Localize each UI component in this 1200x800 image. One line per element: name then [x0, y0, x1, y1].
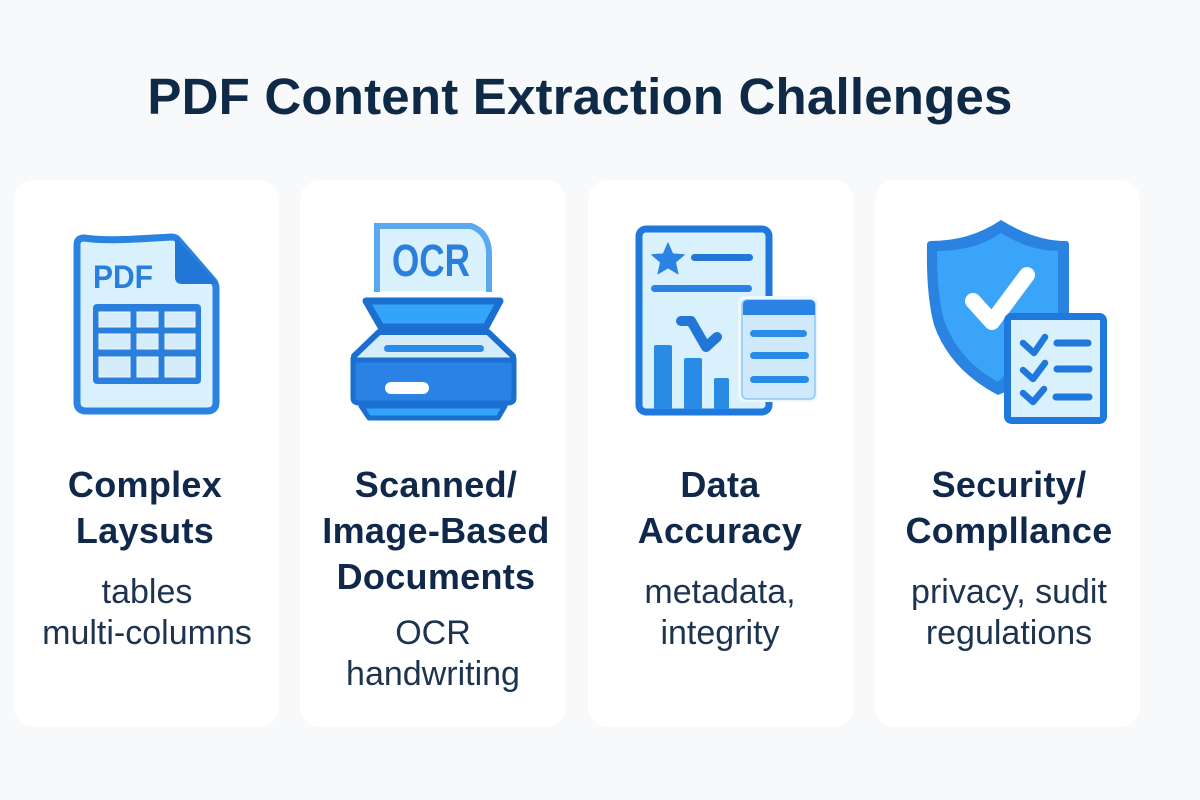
- text: complex layouts details: tables: [102, 573, 192, 611]
- text: data accuracy details: integrity: [660, 614, 780, 652]
- panel: security compliance: [875, 180, 1140, 727]
- text: complex layouts details: multi-columns: [42, 614, 252, 652]
- heading: data accuracy: [638, 464, 802, 551]
- heading: security compliance: [905, 464, 1113, 551]
- panel: scanned documents: [300, 180, 566, 727]
- heading: complex layouts: [68, 464, 222, 551]
- icon: OCR scanner: OCR: [392, 235, 470, 286]
- panel: data accuracy: [588, 180, 854, 727]
- text: data accuracy details: metadata,: [644, 573, 796, 611]
- heading: complex layouts: Laysuts: [76, 510, 214, 551]
- heading: scanned documents: Documents: [337, 556, 535, 597]
- title: PDF Content Extraction Challenges: [147, 68, 1013, 125]
- text: scanned documents details: [346, 614, 520, 693]
- icon: PDF document with table: PDF: [93, 259, 153, 295]
- heading: security compliance: Security/: [932, 464, 1086, 505]
- text: complex layouts details: [42, 573, 252, 652]
- heading: scanned documents: Image-Based: [322, 510, 550, 551]
- heading: scanned documents: [322, 464, 550, 597]
- icon: PDF document with table: [77, 237, 216, 411]
- text: scanned documents details: OCR: [395, 614, 471, 652]
- icon: data report: [639, 229, 818, 412]
- text: data accuracy details: [644, 573, 796, 652]
- text: security compliance details: privacy, sudit: [911, 573, 1107, 611]
- icon: OCR scanner: [353, 226, 514, 418]
- heading: data accuracy: Data: [680, 464, 760, 505]
- text: security compliance details: regulations: [926, 614, 1092, 652]
- icon: shield with checklist: [927, 220, 1104, 420]
- panel: complex layouts: [14, 180, 279, 727]
- heading: security compliance: Compllance: [905, 510, 1113, 551]
- heading: complex layouts: Complex: [68, 464, 222, 505]
- text: scanned documents details: handwriting: [346, 655, 520, 693]
- heading: data accuracy: Accuracy: [638, 510, 802, 551]
- text: security compliance details: [911, 573, 1107, 652]
- heading: scanned documents: Scanned/: [355, 464, 517, 505]
